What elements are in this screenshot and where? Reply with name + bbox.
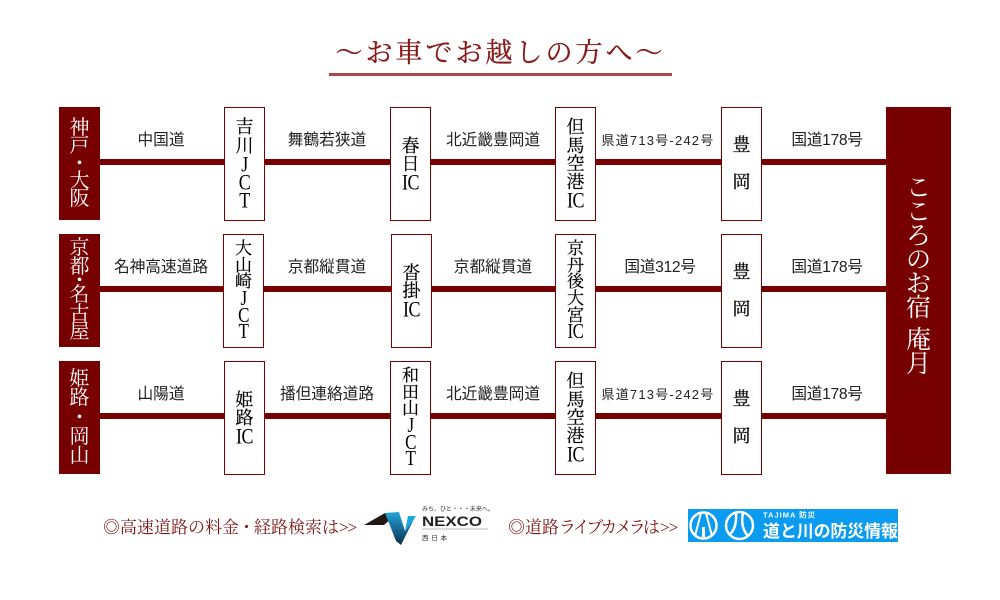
node: 但馬空港IC: 港 [566,172,584,192]
node: 沓掛IC: 沓 [402,263,420,283]
label: 京都縦貫道: 京都縦貫道 [454,259,532,276]
start box: 姫路・岡山: 姫 [70,368,90,390]
node: 但馬空港IC: 馬 [566,136,584,156]
node: 豊岡: 豊 [732,262,750,282]
node: 京丹後大宮IC: 京 [567,239,584,258]
start box: 神戸・大阪: 神 [70,116,90,138]
node: 豊岡 [721,107,762,221]
node: 京丹後大宮IC: IC [568,320,584,343]
node: 和田山JCT: T [406,447,415,470]
node: 但馬空港IC: 但 [566,117,584,137]
start box: 姫路・岡山: 路 [70,386,90,408]
node: 但馬空港IC: 空 [566,154,584,174]
start box: 神戸・大阪 [59,107,100,220]
node: 和田山JCT: 山 [402,399,419,418]
start box: 京都・名古屋 [59,234,100,347]
destination: こころのお宿 庵月: こ [906,175,931,202]
icon: NEXCO logo: NEXCO [422,513,482,529]
node: 和田山JCT [390,361,431,475]
node: 姫路IC: 路 [236,408,254,428]
icon: NEXCO logo: 西日本 [422,533,448,542]
label: 舞鶴若狭道: 舞鶴若狭道 [288,132,366,149]
node: 吉川JCT: J [241,151,248,176]
node: 沓掛IC: IC [403,297,420,322]
node: 豊岡: 岡 [732,299,750,319]
start box: 京都・名古屋: ・ [70,270,90,292]
node: 和田山JCT: 田 [402,383,419,402]
destination: こころのお宿 庵月: 月 [906,351,931,378]
route line 3 [100,412,886,418]
node: 京丹後大宮IC: 丹 [567,256,584,275]
start box: 姫路・岡山: ・ [70,406,90,428]
node: 大山崎JCT [223,234,264,348]
node: 大山崎JCT: C [238,303,249,327]
label: 名神高速道路: 名神高速道路 [114,259,208,276]
node: 豊岡: 岡 [732,426,750,446]
node: 大山崎JCT: 大 [235,239,252,258]
label: 国道178号: 国道178号 [791,259,863,276]
destination: こころのお宿 庵月: お [906,271,931,298]
destination: こころのお宿 庵月: 庵 [906,327,931,354]
node: 豊岡: 岡 [732,172,750,192]
icon: TAJIMA disaster info banner: TAJIMA 防災 [763,510,816,520]
node: 春日IC: IC [402,170,419,195]
node: 春日IC: 春 [402,136,420,156]
start box: 神戸・大阪: 阪 [70,188,90,210]
start box: 神戸・大阪: 大 [70,170,90,192]
node: 姫路IC: IC [236,424,253,449]
destination: こころのお宿 庵月: の [906,247,931,274]
start box: 京都・名古屋: 古 [70,303,90,325]
label: 京都縦貫道: 京都縦貫道 [288,259,366,276]
label: 山陽道: 山陽道 [137,386,185,403]
node: 大山崎JCT: J [240,286,247,310]
route line 2 [100,286,886,292]
label: 北近畿豊岡道: 北近畿豊岡道 [446,386,540,403]
label: 国道312号: 国道312号 [624,259,696,276]
node: 吉川JCT: 川 [236,136,254,156]
label: 県道713号-242号: 県道713号-242号 [602,133,714,148]
node: 京丹後大宮IC: 宮 [567,306,584,325]
start box: 姫路・岡山: 岡 [70,426,90,448]
node: 京丹後大宮IC: 大 [567,289,584,308]
node: 京丹後大宮IC [555,234,596,348]
node: 吉川JCT: T [239,188,250,213]
label: 北近畿豊岡道: 北近畿豊岡道 [446,132,540,149]
node: 大山崎JCT: T [239,320,248,343]
node: 和田山JCT: C [405,430,416,454]
node: 但馬空港IC: IC [567,442,584,467]
start box: 姫路・岡山 [59,361,100,474]
node: 但馬空港IC: 空 [566,408,584,428]
start box: 京都・名古屋: 屋 [70,321,90,343]
node: 但馬空港IC [555,361,596,475]
start box: 姫路・岡山: 山 [70,444,90,466]
icon: NEXCO logo [364,505,492,545]
node: 沓掛IC [391,234,432,348]
node: 姫路IC [224,361,265,475]
node: 但馬空港IC [555,107,596,221]
node: 和田山JCT: 和 [402,366,419,385]
node: 大山崎JCT: 山 [235,256,252,275]
label: 中国道: 中国道 [137,132,185,149]
destination: こころのお宿 庵月: こ [906,199,931,226]
title underline [329,73,672,76]
node: 但馬空港IC: 港 [566,426,584,446]
title: 〜お車でお越しの方へ〜 [336,38,666,68]
icon: TAJIMA disaster info banner [688,509,898,542]
icon: TAJIMA disaster info banner: 道と川の防災情報 [763,522,898,541]
node: 豊岡 [721,234,762,348]
node: 春日IC [390,107,431,221]
node: 吉川JCT: 吉 [236,117,254,137]
start box: 京都・名古屋: 京 [70,237,90,259]
node: 沓掛IC: 掛 [402,281,420,301]
node: 豊岡: 豊 [732,389,750,409]
destination: こころのお宿 庵月 [886,107,951,474]
destination: こころのお宿 庵月: ろ [906,223,931,250]
icon: NEXCO logo: みち、ひと・・・未来へ。 [422,505,492,513]
start box: 京都・名古屋: 都 [70,256,90,278]
node: 京丹後大宮IC: 後 [567,272,584,291]
node: 但馬空港IC: 但 [566,371,584,391]
node: 姫路IC: 姫 [236,390,254,410]
node: 吉川JCT: C [239,170,250,195]
link text: road cameras: ◎道路ライブカメラは>> [508,518,677,537]
start box: 京都・名古屋: 名 [70,284,90,306]
node: 但馬空港IC: 馬 [566,390,584,410]
label: 播但連絡道路: 播但連絡道路 [280,386,374,403]
node: 吉川JCT [224,107,265,221]
start box: 神戸・大阪: 戸 [70,135,90,157]
node: 大山崎JCT: 崎 [235,272,252,291]
link text: highway fees: ◎高速道路の料金・経路検索は>> [103,518,356,537]
label: 県道713号-242号: 県道713号-242号 [602,387,714,402]
destination: こころのお宿 庵月: 宿 [906,295,931,322]
node: 豊岡: 豊 [732,135,750,155]
label: 国道178号: 国道178号 [791,132,863,149]
node: 豊岡 [721,361,762,475]
node: 但馬空港IC: IC [567,188,584,213]
start box: 神戸・大阪: ・ [70,152,90,174]
route line 1 [100,159,886,165]
node: 和田山JCT: J [407,413,414,437]
label: 国道178号: 国道178号 [791,386,863,403]
node: 春日IC: 日 [402,154,420,174]
